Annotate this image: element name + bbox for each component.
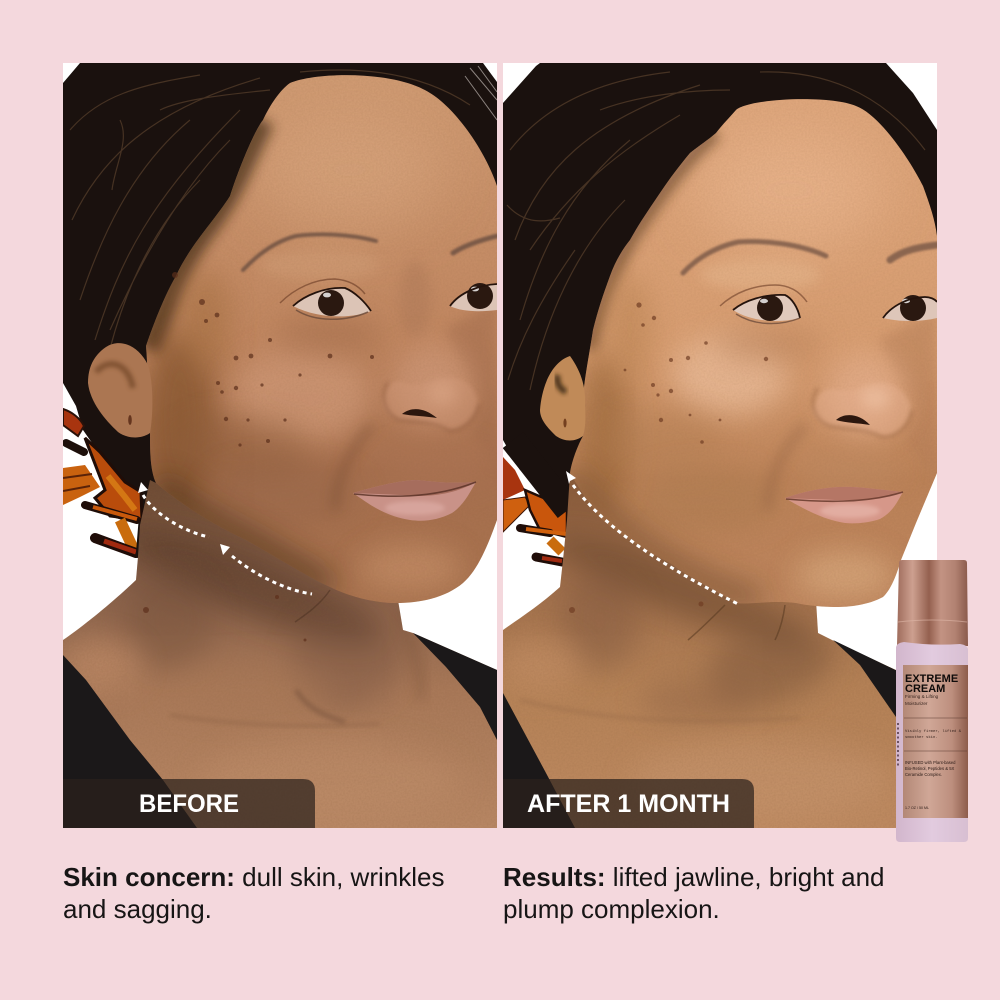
neck shading (before) xyxy=(65,520,430,728)
neck and chest (after) xyxy=(503,473,896,828)
arrow: jawline dotted lift line (after) xyxy=(566,471,738,604)
nose (after) xyxy=(813,383,912,437)
eyebrows (after) xyxy=(683,242,937,273)
black top straps (before) xyxy=(63,633,497,828)
product: Extreme Cream bottle xyxy=(896,560,968,842)
label: after 1 month: AFTER 1 MONTH xyxy=(527,790,730,818)
ear (before) xyxy=(88,343,152,437)
hair (before) xyxy=(63,63,497,557)
lips (before) xyxy=(353,480,476,521)
caption: skin concern xyxy=(63,862,444,924)
product subtitle: Firming & Lifting xyxy=(905,694,939,699)
neck shading (after) xyxy=(514,526,884,798)
eyebrows (before) xyxy=(243,234,497,270)
caption: results xyxy=(503,862,885,924)
label: before: BEFORE xyxy=(139,790,239,818)
face (before) xyxy=(130,63,497,608)
caption: skin concern: Skin concern: dull skin, wrinkles xyxy=(63,862,444,892)
product name: CREAM xyxy=(905,683,945,695)
bottle body xyxy=(896,642,968,842)
product name: EXTREME xyxy=(905,673,958,685)
face shading (after) xyxy=(570,128,937,607)
hair (after) xyxy=(503,63,937,520)
lips (after) xyxy=(785,487,903,523)
icon: tortoiseshell hair clip (after) xyxy=(503,440,568,562)
bottle brand mark xyxy=(897,723,899,767)
ear (after) xyxy=(540,356,585,440)
label: after 1 month xyxy=(503,779,754,828)
product claim: smoother skin. xyxy=(905,735,938,740)
icon: tortoiseshell hair clip (before) xyxy=(63,409,142,558)
product size: 1.7 OZ / 50 ML xyxy=(905,806,929,810)
nose (before) xyxy=(383,377,479,431)
arrow: jawline dotted lift lines (before) xyxy=(138,482,312,594)
neck and chest (before) xyxy=(60,480,497,828)
freckles (after) xyxy=(569,302,768,613)
panel: after photo xyxy=(500,63,937,828)
label: before xyxy=(63,779,315,828)
eyes (after) xyxy=(720,285,937,324)
black top straps (after) xyxy=(503,640,937,828)
product claim: Visibly firmer, lifted & xyxy=(905,729,962,734)
caption: skin concern: and sagging. xyxy=(63,894,212,924)
face (after) xyxy=(560,90,937,610)
bottle cap xyxy=(897,560,968,646)
eyes (before) xyxy=(280,279,497,319)
freckles (before) xyxy=(143,272,374,642)
product ingredients: Ceramide Complex. xyxy=(905,772,942,777)
product ingredients: INFUSED with Plant-based xyxy=(905,760,956,765)
bottle label xyxy=(903,665,968,818)
product subtitle: Moisturizer xyxy=(905,701,928,706)
face shading (before) xyxy=(130,63,497,608)
caption: results: Results: lifted jawline, bright and xyxy=(503,862,885,892)
product ingredients: Bio-Retinol, Peptides & 5X xyxy=(905,766,955,771)
caption: results: plump complexion. xyxy=(503,894,720,924)
panel: before photo xyxy=(60,63,497,828)
